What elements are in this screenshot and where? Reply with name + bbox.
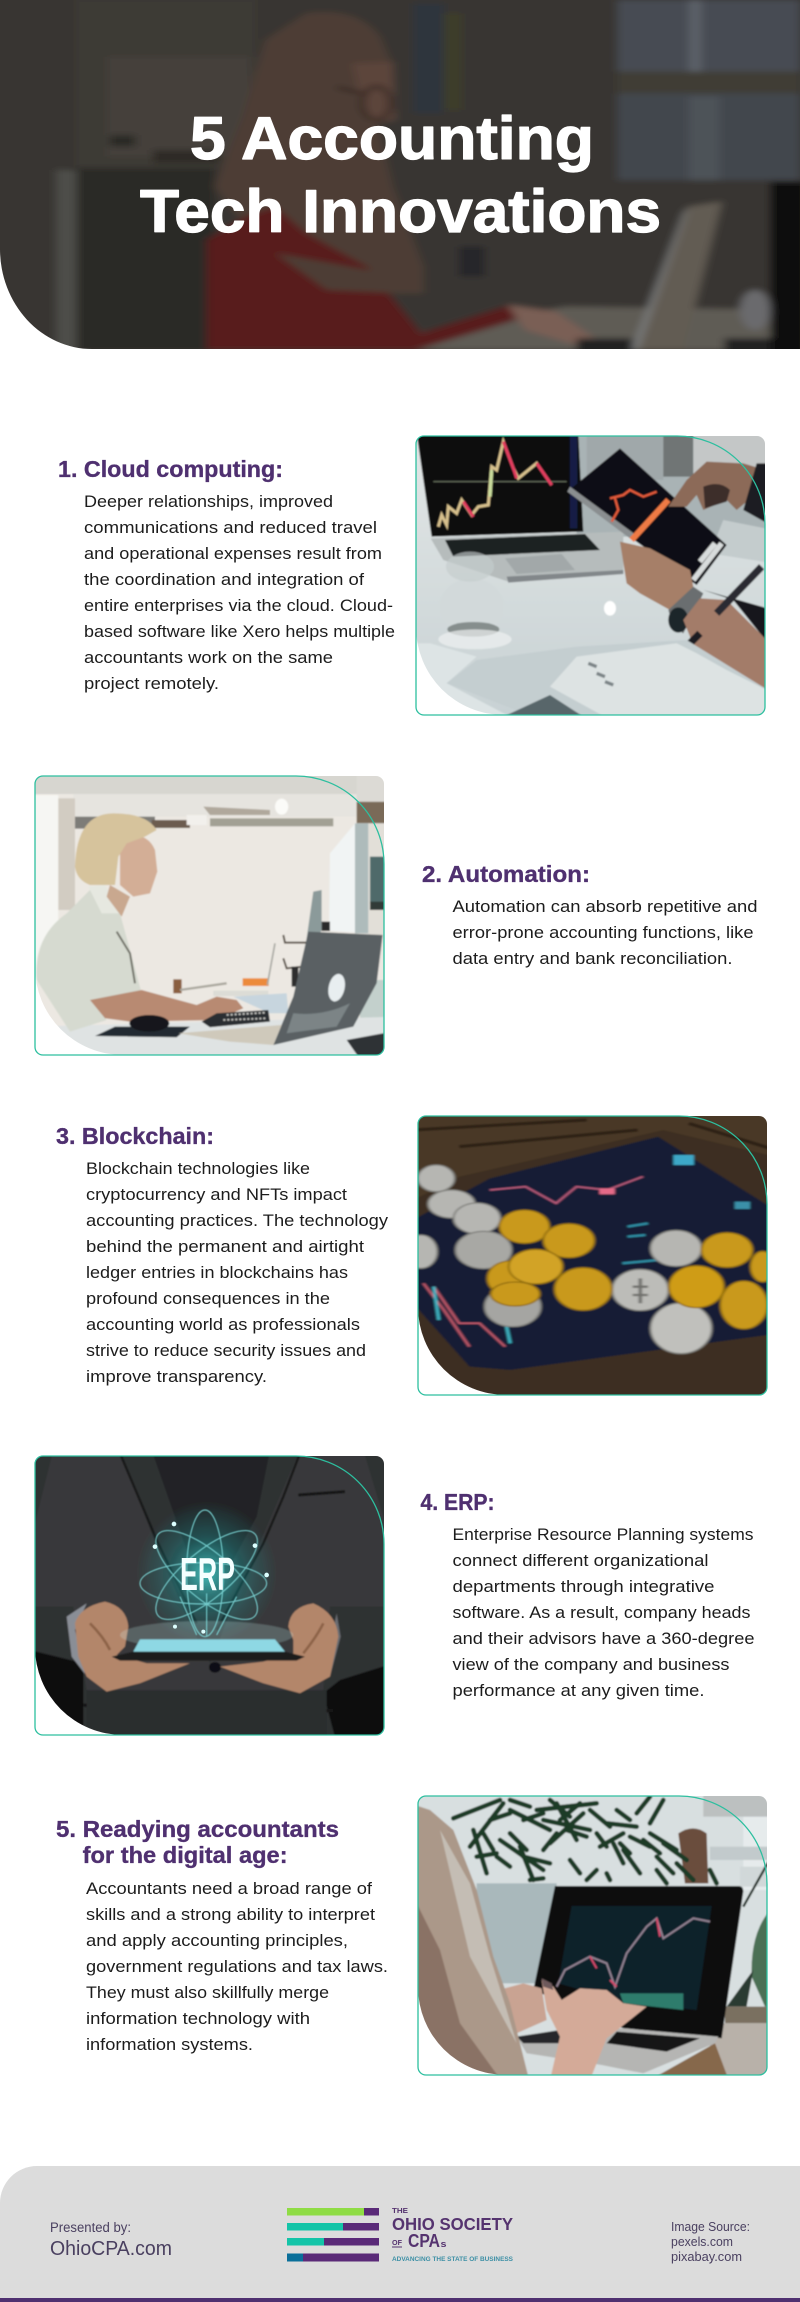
- photo 5: hands on laptop with chart, plant behind: [407, 1787, 780, 2087]
- body text 3: improve transparency.: [86, 1367, 267, 1386]
- heading 1: 1. Cloud computing:: [58, 456, 283, 482]
- photo 1 teal outline: [416, 436, 765, 715]
- logo wordmark: CPA: [408, 2231, 440, 2251]
- body text 5: Accountants need a broad range of: [86, 1879, 372, 1898]
- hologram dots: [153, 1522, 269, 1634]
- body text 4: software. As a result, company heads: [452, 1603, 750, 1622]
- silver coins: [405, 1165, 712, 1354]
- heading 3: 3. Blockchain:: [56, 1123, 214, 1149]
- section 1: cloud computing: [58, 427, 780, 727]
- logo wordmark: s: [440, 2239, 446, 2249]
- keyboard: [202, 1010, 270, 1027]
- body text 5: [86, 1879, 388, 2054]
- section 3: blockchain: [56, 1107, 786, 1407]
- body text 3: Blockchain technologies like: [86, 1159, 310, 1178]
- hand: [508, 305, 602, 345]
- body text 3: behind the permanent and airtight: [86, 1237, 364, 1256]
- hair: [214, 12, 423, 293]
- glow: [145, 1508, 268, 1635]
- body text 1: the coordination and integration of: [84, 570, 364, 589]
- heading 5: [56, 1816, 339, 1868]
- hands: [498, 1983, 547, 2033]
- photo 4: man holding a tablet with ERP hologram: [36, 1456, 384, 1734]
- section 5: readying accountants: [56, 1787, 780, 2087]
- mouse and pad: [95, 1027, 190, 1037]
- hero banner: [0, 0, 800, 360]
- desk: [58, 1016, 384, 1054]
- presented by: [50, 2220, 172, 2260]
- hero photo: woman at laptop, darkened: [0, 0, 800, 360]
- right plant: [743, 1853, 773, 1907]
- body text 3: cryptocurrency and NFTs impact: [86, 1185, 347, 1204]
- logo wordmark: OF: [392, 2240, 403, 2247]
- photo 2: woman at desktop and laptop: [36, 776, 384, 1054]
- monitors: [329, 824, 355, 932]
- laptop: [431, 532, 623, 582]
- hero title: [140, 105, 661, 245]
- logo wordmark: [392, 2208, 514, 2263]
- body text 5: They must also skillfully merge: [86, 1983, 329, 2002]
- body text 2: [452, 897, 758, 968]
- laptop: [273, 932, 383, 1045]
- gold coins: [487, 1210, 775, 1329]
- laptop base: [517, 2028, 718, 2073]
- heading 4: 4. ERP:: [420, 1489, 494, 1515]
- body text 4: and their advisors have a 360-degree: [452, 1629, 754, 1648]
- body text 3: accounting practices. The technology: [86, 1211, 389, 1230]
- orbits: [140, 1510, 270, 1637]
- body text 3: accounting world as professionals: [86, 1315, 360, 1334]
- body text 1: accountants work on the same: [84, 648, 333, 667]
- body text 1: entire enterprises via the cloud. Cloud-: [84, 596, 393, 615]
- laptop: [652, 200, 724, 311]
- body text 1: Deeper relationships, improved: [84, 492, 333, 511]
- image source: pixabay.com: [671, 2249, 742, 2264]
- pen arm: [705, 590, 764, 639]
- plant leaves: [453, 1797, 717, 1883]
- body text 1: and operational expenses result from: [84, 544, 382, 563]
- section 2: automation: [27, 767, 758, 1067]
- body text 3: strive to reduce security issues and: [86, 1341, 366, 1360]
- table: [416, 307, 800, 350]
- body text 4: [452, 1525, 754, 1700]
- photo 3: crypto coins on a chart: [418, 1116, 767, 1394]
- body text 1: [84, 492, 395, 693]
- body text 3: profound consequences in the: [86, 1289, 330, 1308]
- logo wordmark: THE: [392, 2208, 408, 2215]
- lower hand: [620, 542, 693, 610]
- heading 5: 5. Readying accountants: [56, 1816, 339, 1842]
- body text 2: data entry and bank reconciliation.: [452, 949, 732, 968]
- footer: [0, 2166, 800, 2302]
- shoulder: [410, 1803, 530, 2083]
- body text 1: project remotely.: [84, 674, 219, 693]
- heading 2: 2. Automation:: [422, 861, 590, 887]
- desk clutter: [243, 978, 269, 986]
- photo 1: laptop and tablet with stock charts: [416, 436, 765, 714]
- hero title: Tech Innovations: [140, 178, 661, 245]
- woman: [36, 887, 142, 1032]
- logo bars: [287, 2208, 379, 2262]
- presented by: Presented by:: [50, 2220, 131, 2235]
- photo 2 teal outline: [35, 776, 384, 1055]
- hands: [75, 1602, 190, 1692]
- body text 3: ledger entries in blockchains has: [86, 1263, 348, 1282]
- photo 5 teal outline: [418, 1796, 767, 2075]
- image source: pexels.com: [671, 2234, 733, 2249]
- body text 2: error-prone accounting functions, like: [452, 923, 754, 942]
- photo 3 teal outline: [418, 1116, 767, 1395]
- cuffs: [67, 1603, 87, 1674]
- hero title: 5 Accounting: [190, 105, 594, 172]
- body text 4: performance at any given time.: [452, 1681, 704, 1700]
- photo 4 teal outline: [35, 1456, 384, 1735]
- paper and table bottom: [417, 643, 510, 717]
- tablet: [112, 1652, 305, 1661]
- body text 5: and apply accounting principles,: [86, 1931, 348, 1950]
- body text 5: skills and a strong ability to interpret: [86, 1905, 375, 1924]
- body text 3: [86, 1159, 389, 1386]
- logo: Ohio Society of CPAs: [287, 2208, 514, 2263]
- body text 4: connect different organizational: [452, 1551, 708, 1570]
- footer panel: [0, 2166, 800, 2302]
- logo wordmark: OHIO SOCIETY: [392, 2214, 513, 2234]
- body text 4: Enterprise Resource Planning systems: [452, 1525, 754, 1544]
- footer purple bar: [0, 2298, 800, 2302]
- body text 4: departments through integrative: [452, 1577, 714, 1596]
- body text 5: information systems.: [86, 2035, 253, 2054]
- sweater: [207, 207, 516, 350]
- heading 5: for the digital age:: [83, 1842, 288, 1868]
- presented by: OhioCPA.com: [50, 2237, 172, 2260]
- logo wordmark: ADVANCING THE STATE OF BUSINESS: [392, 2256, 514, 2263]
- upper hand: [668, 462, 760, 510]
- tablet: [567, 448, 727, 585]
- body text 5: government regulations and tax laws.: [86, 1957, 388, 1976]
- table: [710, 2023, 773, 2083]
- ERP hologram label: ERP: [180, 1548, 235, 1600]
- section 4: ERP: [27, 1447, 755, 1747]
- glass: [440, 578, 504, 635]
- image source: Image Source:: [671, 2219, 750, 2234]
- body text 4: view of the company and business: [452, 1655, 730, 1674]
- body text 2: Automation can absorb repetitive and: [452, 897, 758, 916]
- body text 5: information technology with: [86, 2009, 310, 2028]
- suit and hands: [36, 1456, 384, 1734]
- laptop: [533, 1886, 743, 2038]
- image source: [671, 2219, 750, 2264]
- watch: [668, 587, 703, 633]
- body text 1: communications and reduced travel: [84, 518, 377, 537]
- body text 1: based software like Xero helps multiple: [84, 622, 395, 641]
